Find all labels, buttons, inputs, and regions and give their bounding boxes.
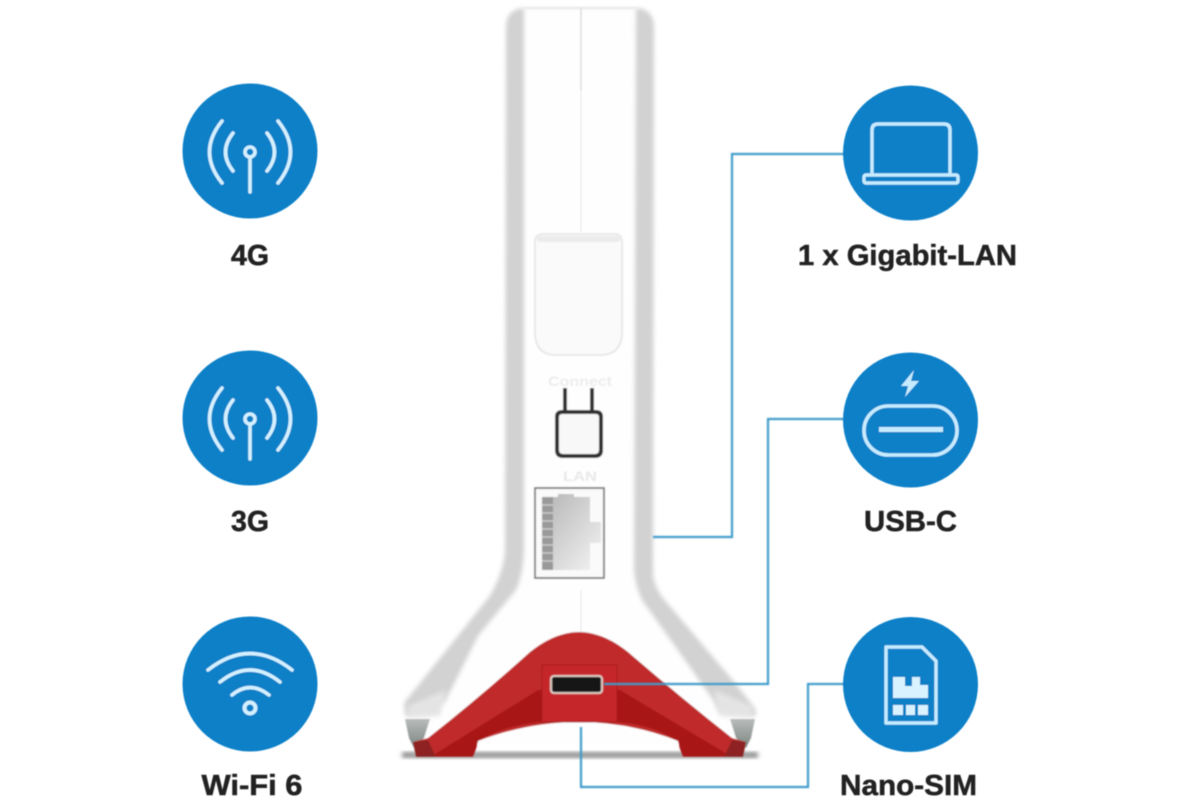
- centre seam: [580, 8, 582, 90]
- Nano-SIM feature: [840, 617, 978, 800]
- connect label: Connect: [548, 373, 612, 389]
- label: 4G: 4G: [231, 240, 269, 272]
- icon: laptop: [843, 86, 978, 220]
- label: 1 x Gigabit-LAN: 1 x Gigabit-LAN: [798, 240, 1017, 272]
- top recess: [535, 234, 622, 355]
- floor shadow: [402, 752, 758, 758]
- USB-C port: [551, 676, 602, 693]
- 3G feature: [182, 350, 318, 538]
- top edge: [524, 6, 636, 10]
- 4G feature: [182, 84, 318, 272]
- feet collars: [405, 719, 755, 748]
- icon: Wi-Fi: [182, 616, 318, 752]
- port panel: [542, 665, 617, 722]
- icon: 4G antenna: [182, 84, 318, 218]
- icon: USB-C: [843, 352, 978, 488]
- LAN port: [535, 488, 604, 578]
- device: repeater: [402, 6, 758, 758]
- label: USB-C: USB-C: [864, 506, 957, 538]
- icon: 3G antenna: [182, 350, 318, 486]
- connector lines: [581, 154, 846, 787]
- Gigabit-LAN feature: [798, 86, 1017, 272]
- line: SIM slot to Nano-SIM: [581, 684, 846, 787]
- side shading: [404, 8, 756, 718]
- USB-C feature: [843, 352, 978, 538]
- device body: [405, 6, 755, 745]
- Wi-Fi 6 feature: [182, 616, 318, 800]
- label: 3G: 3G: [231, 506, 269, 538]
- icon: power plug: [557, 388, 601, 456]
- line: USB-C port to USB-C: [604, 419, 846, 684]
- icon: SIM card: [843, 617, 978, 752]
- red base: [413, 632, 746, 757]
- LAN label: LAN: [563, 468, 597, 484]
- line: LAN port to Gigabit-LAN: [653, 154, 846, 537]
